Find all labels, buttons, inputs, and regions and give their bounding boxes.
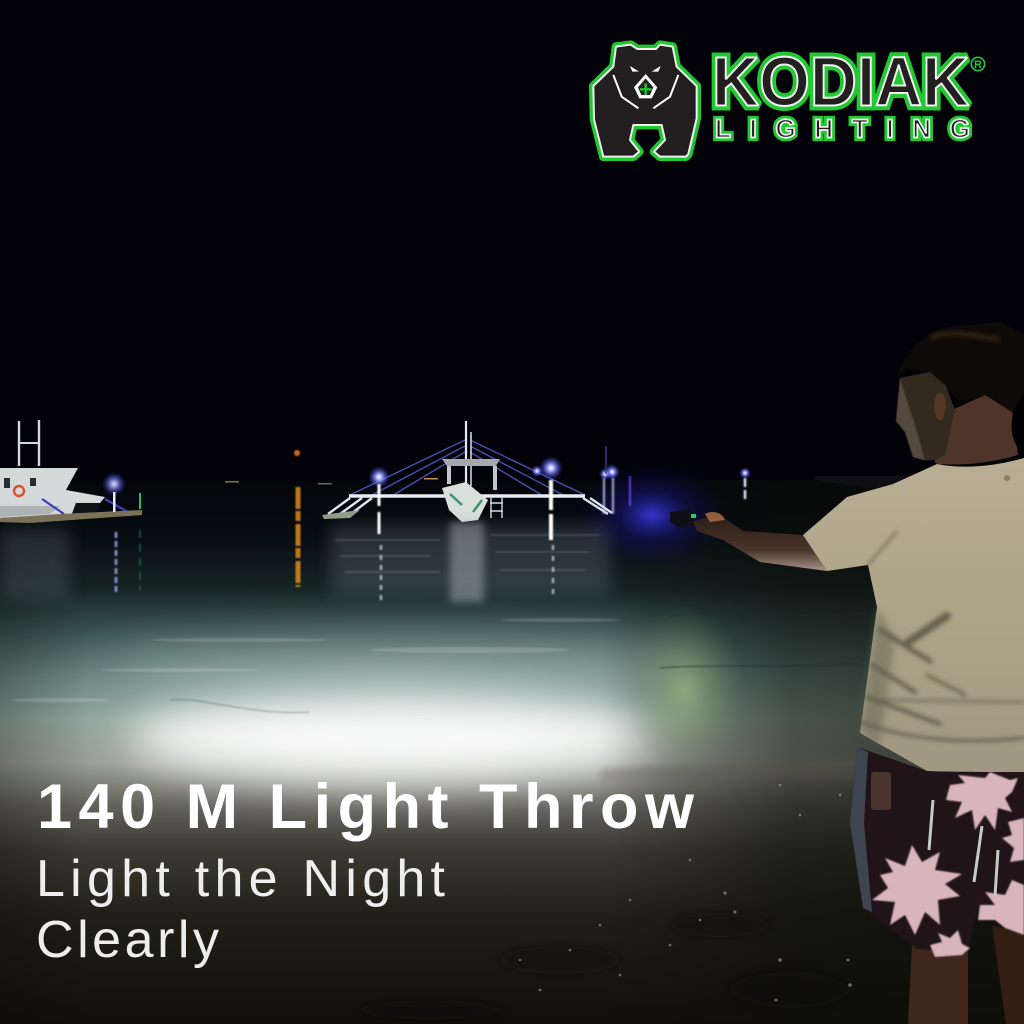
subheading (36, 850, 446, 969)
boat: moored catamaran on left (0, 420, 142, 600)
head and neck (896, 322, 1024, 465)
far lamp on the right (739, 467, 751, 479)
registered mark: R (974, 59, 982, 71)
wordmark LIGHTING: LIGHTING (715, 113, 970, 143)
person holding flashlight (670, 322, 1024, 1024)
t-shirt (803, 458, 1024, 772)
distant shore lights (225, 450, 438, 587)
subheading: Light the Night (36, 850, 446, 908)
subheading: Clearly (36, 911, 219, 969)
headline: 140 M Light Throw (37, 772, 695, 842)
flashlight (670, 509, 696, 527)
registered mark (971, 57, 985, 71)
wordmark KODIAK: KODIAK (712, 42, 969, 120)
boat: central outrigger bangka (322, 421, 620, 522)
water reflections of lights (330, 476, 745, 602)
arm (693, 513, 827, 571)
distant pier (815, 476, 935, 490)
logo: Kodiak Lighting (593, 42, 985, 157)
shorts with palm print (850, 747, 1024, 957)
wordmark KODIAK: KODIAK (712, 42, 969, 120)
wordmark LIGHTING: LIGHTING (715, 113, 970, 143)
legs (908, 925, 1024, 1024)
shoreline scene (0, 480, 1024, 1024)
bear mark (593, 45, 697, 157)
flashlight blue glow (572, 460, 732, 570)
